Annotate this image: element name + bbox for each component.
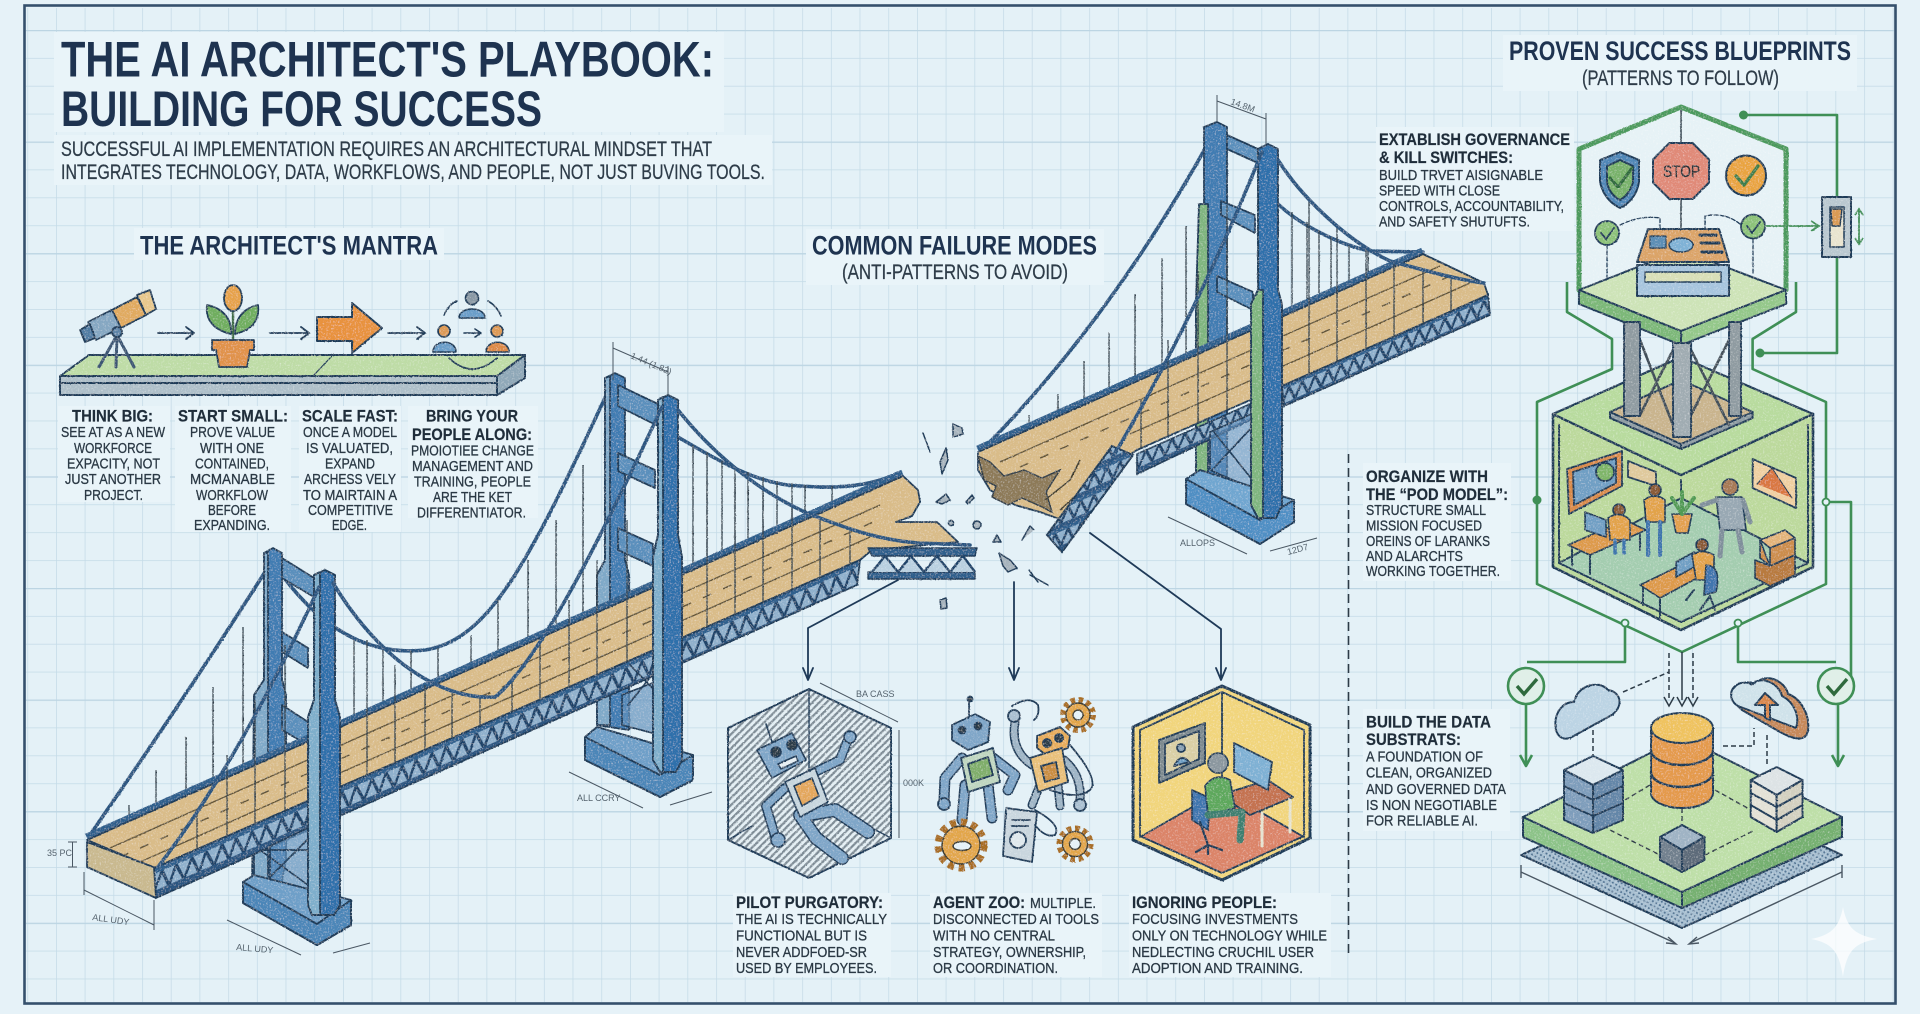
cloud left [1555, 685, 1620, 739]
pod model text: MISSION FOCUSED [1366, 518, 1482, 534]
arrow: to agent zoo [1009, 582, 1019, 680]
tower B rear leg [597, 373, 658, 730]
server right [1751, 767, 1802, 832]
left truss [154, 548, 977, 898]
data substrate text: CLEAN, ORGANIZED [1366, 764, 1492, 782]
wall screen [1159, 723, 1205, 783]
arrow: to ignoring people [1090, 533, 1226, 680]
far cables and hangers [92, 387, 898, 832]
cloud right with arrow [1731, 678, 1808, 738]
mantra column 2: start small: CONTAINED, [195, 456, 269, 472]
scaffold legs on pod [1624, 322, 1741, 437]
icon: stop sign: STOP [1663, 162, 1700, 181]
data substrate text: IS NON NEGOTIABLE [1366, 797, 1497, 814]
near hangers [1141, 200, 1451, 448]
governance hexagon [1579, 107, 1786, 345]
heading: proven success blueprints: (PATTERNS TO FOLLOW) [1582, 67, 1779, 90]
failure text: pilot purgatory: PILOT PURGATORY: [736, 894, 883, 912]
governance text: SPEED WITH CLOSE [1379, 182, 1500, 200]
wall boards [1567, 451, 1796, 514]
mantra column 3: scale fast: IS VALUATED, [306, 440, 393, 457]
pod model text: AND ALARCHTS [1366, 548, 1463, 565]
sparkle watermark [1811, 907, 1877, 977]
desk and monitor [1220, 743, 1293, 846]
mantra column 2: start small: MCMANABLE [190, 471, 275, 488]
mantra column 3: scale fast: ARCHESS VELY [304, 471, 396, 488]
mantra column 2: start small: WORKFLOW [196, 487, 269, 504]
robot two [1008, 700, 1092, 811]
mantra column 3: scale fast: COMPETITIVE [308, 502, 393, 519]
mantra column 3: scale fast: EXPAND [325, 456, 375, 472]
dimension annotations: 000K [903, 778, 924, 788]
mantra column 2: start small: PROVE VALUE [190, 424, 275, 441]
mantra column 1: think big [58, 406, 170, 504]
mantra column 1: think big: EXPACITY, NOT [67, 456, 160, 472]
heading: the architect's mantra: THE ARCHITECT'S MANTRA [140, 230, 438, 260]
icon: shield with check [1600, 152, 1639, 208]
right deck [978, 252, 1488, 520]
failure text: ignoring people: FOCUSING INVESTMENTS [1132, 911, 1298, 928]
right bridge section [978, 122, 1490, 552]
dimension annotations: BA CASS [856, 689, 895, 699]
icon: stop sign [1653, 143, 1709, 199]
mantra column 4: bring your people along [408, 406, 538, 522]
near cables [1105, 152, 1484, 470]
platform dimension arrows [1521, 865, 1842, 944]
data flow arrows [1593, 652, 1767, 767]
governance text: BUILD TRVET AISIGNABLE [1379, 167, 1543, 184]
tower C front leg and footing [1186, 144, 1294, 544]
icon: orange check [1726, 156, 1766, 196]
failure text: pilot purgatory: NEVER ADDFOED-SR [736, 944, 867, 961]
heading: common failure modes: (ANTI-PATTERNS TO AVOID) [842, 261, 1068, 284]
mantra column 2: start small: EXPANDING. [194, 517, 270, 534]
blueprint tower: pod level [1553, 322, 1813, 630]
governance text: CONTROLS, ACCOUNTABILITY, [1379, 198, 1564, 215]
pod people and desks [1568, 479, 1795, 620]
debris [923, 424, 1048, 609]
switch arrows [1765, 209, 1863, 244]
failure text: agent zoo: OR COORDINATION. [933, 960, 1058, 977]
icon: big orange arrow [317, 303, 382, 353]
data platform [1521, 678, 1842, 928]
robot sitting [757, 724, 868, 858]
failure text: agent zoo: WITH NO CENTRAL [933, 928, 1055, 944]
robot one [938, 696, 1015, 820]
governance text: AND SAFETY SHUTUFTS. [1379, 214, 1530, 230]
failure text: agent zoo [930, 893, 1102, 977]
failure text: ignoring people: NEDLECTING CRUCHIL USER [1132, 944, 1314, 961]
far cables and hangers [986, 140, 1423, 446]
divider: dashed section line [1348, 454, 1350, 955]
left deck [87, 474, 958, 898]
mantra illustration [60, 285, 525, 395]
failure text: agent zoo: AGENT ZOO: [933, 894, 1025, 912]
mantra column 4: bring your people along: BRING YOUR [426, 408, 518, 426]
title [54, 32, 724, 137]
mantra column 1: think big: PROJECT. [84, 487, 143, 504]
mantra column 4: bring your people along: PEOPLE ALONG: [412, 426, 532, 444]
icon: small checks [1595, 214, 1765, 278]
icon: telescope [80, 290, 156, 367]
failure text: agent zoo: MULTIPLE. [1030, 895, 1096, 912]
dimension annotations: 1.44 (1.82) [629, 351, 673, 377]
dimension annotations: ALL UDY [92, 912, 130, 927]
person at desk [1192, 753, 1242, 854]
subtitle: SUCCESSFUL AI IMPLEMENTATION REQUIRES AN ARCHITECTURAL MINDSET THAT [61, 138, 712, 161]
pod model text [1363, 463, 1511, 581]
arrow: to pilot purgatory [803, 580, 898, 680]
mantra column 2: start small: START SMALL: [178, 408, 288, 426]
server small [1660, 825, 1704, 872]
icon: people cycle [433, 292, 509, 369]
kill switch [1822, 197, 1851, 257]
subtitle [54, 135, 772, 185]
dimension annotations: ALL CCRY [577, 793, 621, 803]
pod model text: THE “POD MODEL”: [1366, 486, 1508, 504]
pod model text: ORGANIZE WITH [1366, 468, 1488, 486]
left bridge section [87, 373, 977, 945]
dimension annotations: 12D7 [1286, 542, 1309, 557]
blueprint tower: governance level [1579, 107, 1863, 345]
arrows between mantra steps [158, 327, 425, 339]
dimension annotations: 14.8M [1229, 96, 1256, 114]
data substrate text: FOR RELIABLE AI. [1366, 812, 1478, 830]
near hangers [197, 478, 850, 849]
data substrate text [1363, 709, 1510, 831]
pod model text: WORKING TOGETHER. [1366, 563, 1500, 580]
heading: common failure modes [806, 229, 1104, 285]
heading: common failure modes: COMMON FAILURE MODES [812, 230, 1097, 260]
gears [938, 700, 1093, 868]
mantra column 2: start small: BEFORE [208, 502, 256, 519]
pod model text: STRUCTURE SMALL [1366, 502, 1486, 519]
tower A rear leg [252, 548, 314, 890]
under-deck bracing [1210, 412, 1256, 490]
panel: agent zoo robots and gears [938, 696, 1093, 868]
failure text: pilot purgatory: FUNCTIONAL BUT IS [736, 928, 867, 944]
failure text: ignoring people: IGNORING PEOPLE: [1132, 894, 1277, 912]
mantra column 2: start small: WITH ONE [200, 440, 264, 457]
mantra column 4: bring your people along: DIFFERENTIATOR. [417, 504, 526, 522]
title: THE AI ARCHITECT'S PLAYBOOK: [61, 32, 714, 88]
failure text: agent zoo: STRATEGY, OWNERSHIP, [933, 944, 1086, 961]
dashed platform links [1610, 785, 1760, 855]
governance text: EXTABLISH GOVERNANCE [1379, 131, 1570, 149]
mantra column 2: start small [175, 406, 291, 534]
mantra column 1: think big: THINK BIG: [72, 408, 153, 426]
mantra column 4: bring your people along: TRAINING, PEOPLE [414, 474, 531, 490]
data substrate text: AND GOVERNED DATA [1366, 781, 1506, 798]
pod model text: OREINS OF LARANKS [1366, 533, 1490, 550]
under-deck bracing [260, 660, 664, 892]
tower B front leg and footing [585, 395, 693, 797]
platform [60, 355, 525, 395]
dimension annotations: ALL UDY [236, 942, 274, 955]
mantra column 3: scale fast: SCALE FAST: [302, 408, 398, 426]
mantra column 1: think big: JUST ANOTHER [65, 471, 161, 488]
mantra column 1: think big: SEE AT AS A NEW [61, 424, 166, 441]
mantra column 3: scale fast: ONCE A MODEL [303, 424, 397, 441]
subtitle: INTEGRATES TECHNOLOGY, DATA, WORKFLOWS, AND PEOPLE, NOT JUST BUVING TOOLS. [61, 161, 765, 184]
governance text: & KILL SWITCHES: [1379, 149, 1513, 167]
icon: plant in pot [207, 285, 258, 367]
failure text: ignoring people: ADOPTION AND TRAINING. [1132, 960, 1303, 977]
failure text: pilot purgatory: THE AI IS TECHNICALLY [736, 911, 887, 928]
near cables [158, 407, 970, 867]
panel: ignoring people room [1133, 686, 1310, 880]
title: BUILDING FOR SUCCESS [61, 81, 542, 137]
mantra column 3: scale fast: TO MAIRTAIN A [303, 487, 397, 504]
tower C rear leg [1196, 122, 1258, 486]
data substrate text: A FOUNDATION OF [1366, 748, 1483, 766]
database cylinder [1651, 713, 1713, 808]
mantra column 4: bring your people along: MANAGEMENT AND [412, 458, 533, 475]
failure text: ignoring people [1129, 893, 1331, 977]
dimension annotations: 35 PC [47, 848, 73, 858]
console [1637, 229, 1729, 296]
mantra column 4: bring your people along: ARE THE KET [433, 489, 512, 506]
mantra column 3: scale fast: EDGE. [332, 517, 367, 534]
dimension annotations [47, 95, 1317, 955]
heading: proven success blueprints [1503, 35, 1857, 91]
tower A front leg and footing [243, 570, 351, 945]
pod cube [1553, 357, 1813, 630]
failure text: ignoring people: ONLY ON TECHNOLOGY WHILE [1132, 928, 1327, 944]
failure text: agent zoo: DISCONNECTED AI TOOLS [933, 911, 1099, 928]
dimension annotations: ALLOPS [1180, 538, 1215, 548]
layered base [1521, 737, 1842, 928]
failure text: pilot purgatory [733, 893, 891, 977]
right truss [1047, 295, 1490, 552]
data substrate text: BUILD THE DATA [1366, 714, 1491, 732]
green circuit outline [1527, 110, 1851, 676]
mantra column 3: scale fast [299, 406, 401, 534]
device [1003, 808, 1056, 862]
server left [1564, 756, 1623, 833]
mantra column 1: think big: WORKFORCE [74, 440, 152, 457]
check nodes and down arrows [1508, 668, 1854, 766]
governance text [1376, 127, 1574, 231]
mantra column 4: bring your people along: PMOIOTIEE CHANGE [411, 442, 534, 460]
panel: pilot purgatory cage with robot [728, 689, 891, 878]
data substrate text: SUBSTRATS: [1366, 731, 1461, 749]
failure text: pilot purgatory: USED BY EMPLOYEES. [736, 960, 877, 977]
